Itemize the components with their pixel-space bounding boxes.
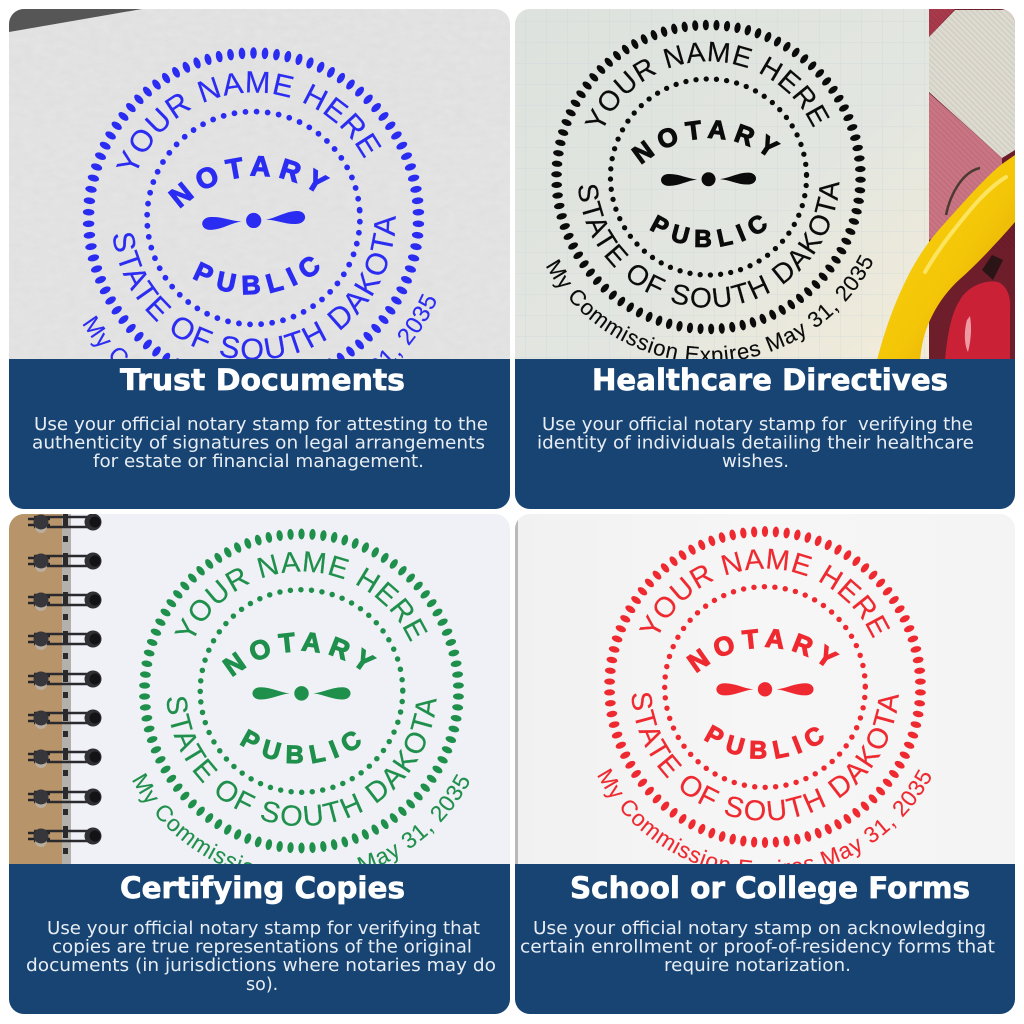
icon: center spinner [661, 171, 756, 187]
stamp text: commission: My Commission Expires May 31, 2035 [132, 773, 470, 864]
stamp text: public: PUBLIC [240, 728, 361, 764]
photo: spiral notebook [9, 514, 510, 866]
description [520, 919, 995, 976]
stamp text: commission: My Commission Expires May 31, 2035 [82, 294, 436, 359]
description: Use your official notary stamp for verifying the [542, 415, 973, 435]
stamp text: commission: My Commission Expires May 31, 2035 [546, 254, 872, 359]
stamp text: commission: My Commission Expires May 31, 2035 [597, 768, 931, 864]
photo: white notebook page [515, 514, 1015, 866]
description: copies are true representations of the original [52, 938, 472, 958]
description: Use your official notary stamp for attesting to the [34, 415, 488, 435]
banner: Certifying Copies [9, 864, 510, 1014]
outer beaded ring [556, 486, 974, 888]
stamp text: your name here: YOUR NAME HERE [174, 551, 428, 642]
stamp text: notary: NOTARY [686, 628, 840, 674]
description: Use your official notary stamp on acknowledging [533, 919, 986, 939]
card: School or College Forms [515, 514, 1015, 1014]
stamp text: public: PUBLIC [704, 724, 824, 760]
description: identity of individuals detailing their healthcare [537, 434, 974, 454]
inner dotted ring [200, 590, 403, 792]
description [26, 919, 496, 995]
card: Healthcare Directives [515, 9, 1015, 509]
card: Trust Documents [9, 9, 510, 509]
description [538, 416, 973, 468]
stamp: red notary seal [597, 526, 931, 864]
photo: textured white paper [9, 9, 510, 361]
stamp: green notary seal [132, 528, 470, 864]
banner: Trust Documents [9, 359, 510, 509]
description: authenticity of signatures on legal arrangements [32, 434, 485, 454]
description: so). [246, 975, 278, 995]
stamp text: your name here: YOUR NAME HERE [638, 548, 890, 638]
stamp text: state: STATE OF SOUTH DAKOTA [632, 693, 899, 821]
heading: School or College Forms [570, 871, 970, 905]
inner dotted ring [665, 587, 865, 787]
description: documents (in jurisdictions where notaries may do [26, 956, 496, 976]
description [32, 415, 488, 472]
stamp text: notary: NOTARY [630, 120, 781, 165]
spiral coils [28, 514, 102, 847]
heading: Trust Documents [120, 363, 405, 397]
icon: center spinner [202, 211, 306, 230]
description: require notarization. [664, 956, 851, 976]
description: certain enrollment or proof-of-residency forms that [520, 938, 995, 958]
icon: center spinner [716, 682, 814, 696]
stamp: blue notary seal [82, 47, 436, 359]
card: Certifying Copies [9, 514, 510, 1014]
stamp text: your name here: YOUR NAME HERE [584, 42, 830, 128]
heading: Healthcare Directives [592, 363, 948, 397]
stamp text: state: STATE OF SOUTH DAKOTA [578, 182, 840, 308]
inner dotted ring [609, 77, 808, 277]
icon: center spinner [252, 686, 351, 701]
stamp text: notary: NOTARY [168, 156, 330, 208]
outer beaded ring [551, 20, 866, 334]
banner: Healthcare Directives [515, 359, 1015, 509]
stamp text: public: PUBLIC [650, 214, 767, 248]
photo: checked cloth and chili peppers [877, 9, 1015, 361]
stamp text: state: STATE OF SOUTH DAKOTA [113, 216, 396, 359]
stamp text: your name here: YOUR NAME HERE [116, 71, 382, 168]
stamp text: state: STATE OF SOUTH DAKOTA [166, 697, 437, 826]
photo: graph paper [515, 9, 930, 361]
outer beaded ring [82, 47, 424, 359]
stamp text: public: PUBLIC [192, 256, 320, 295]
heading: Certifying Copies [120, 871, 405, 905]
description: Use your official notary stamp for verifying that [47, 919, 480, 939]
stamp text: notary: NOTARY [222, 632, 377, 677]
banner: School or College Forms [515, 864, 1015, 1014]
stamp: black notary seal [546, 20, 872, 359]
description: wishes. [722, 452, 789, 472]
inner dotted ring [140, 104, 367, 332]
description: for estate or financial management. [93, 452, 424, 472]
outer beaded ring [139, 528, 464, 854]
